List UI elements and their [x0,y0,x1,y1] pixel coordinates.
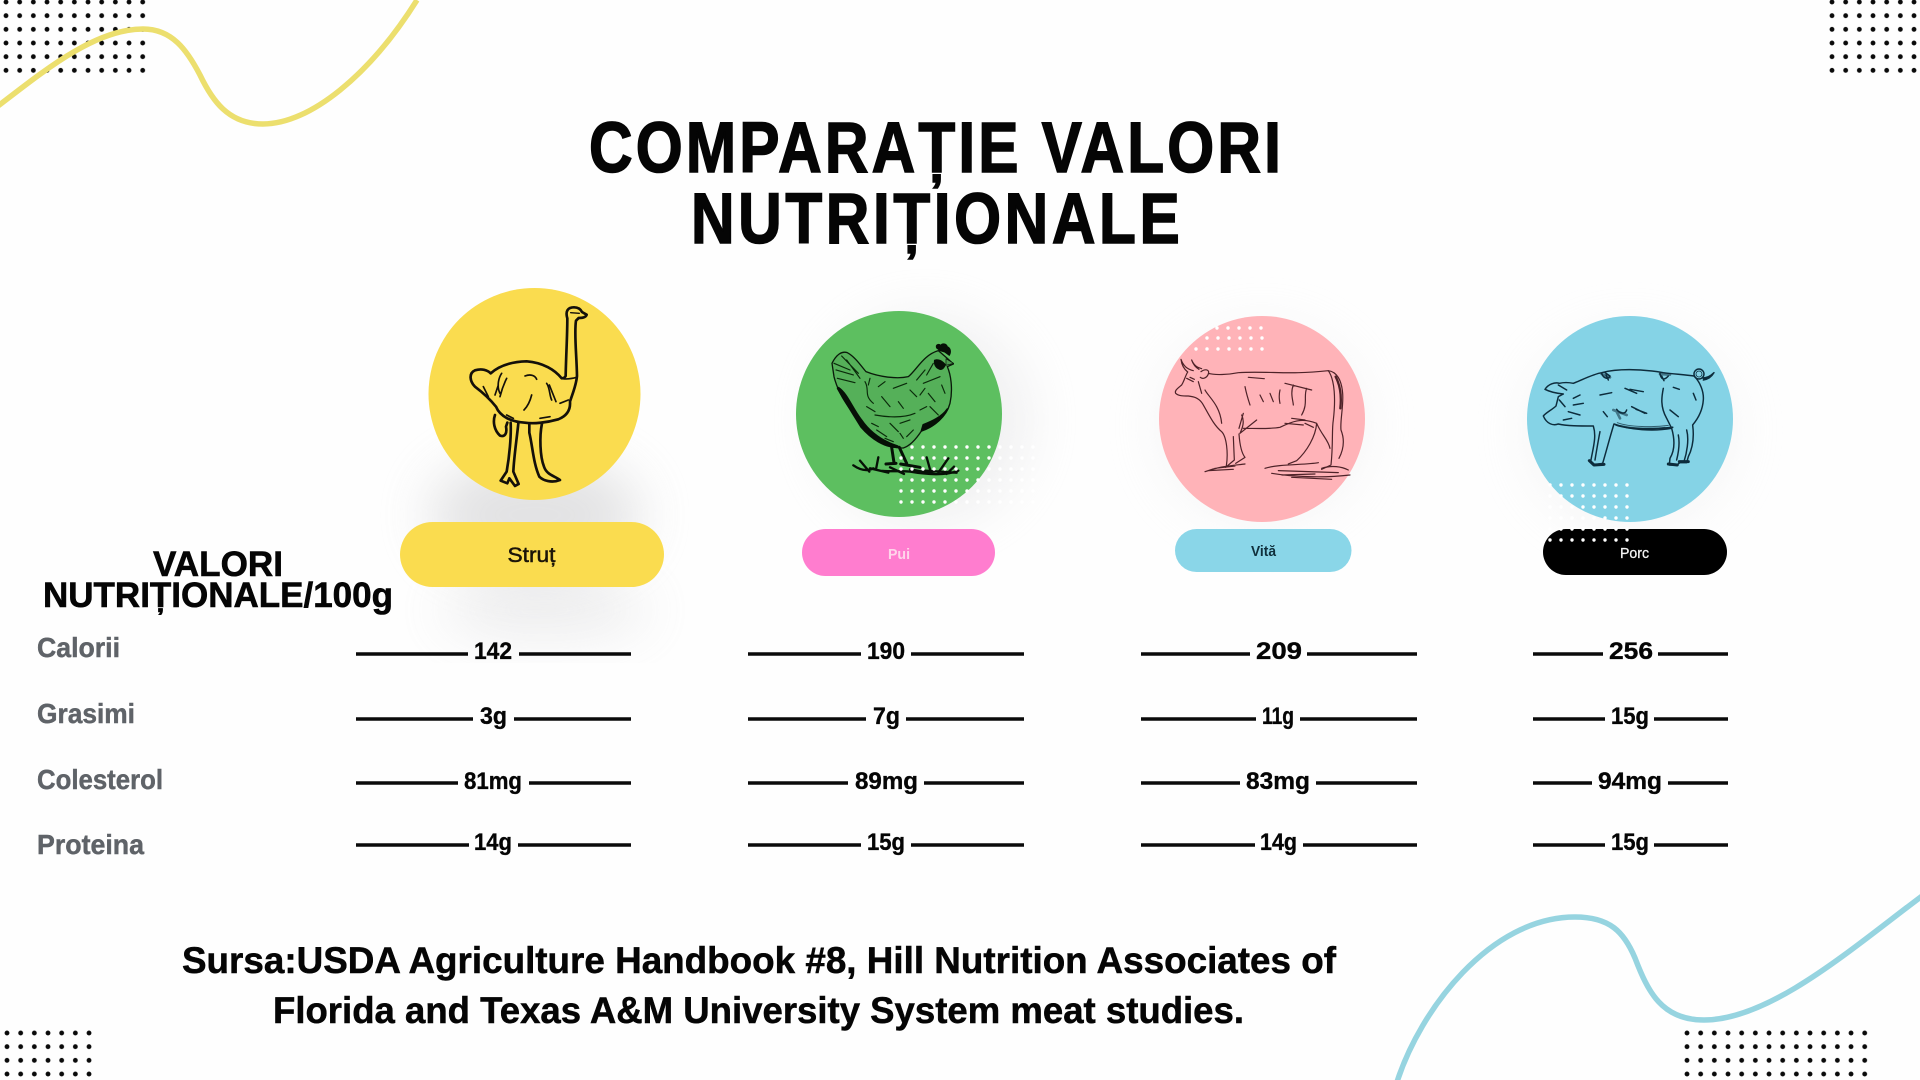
white dot texture [1190,322,1268,354]
source note [182,940,1337,1031]
values: Pui: 190 [867,638,905,665]
row labels: Grasimi [37,698,135,729]
heading: valori nutriționale per 100g: VALORI [153,545,283,584]
title: NUTRIȚIONALE [691,178,1180,259]
soft shadows behind the animal cards [430,315,1735,634]
values: Struț [356,638,631,856]
green circle [796,311,1002,517]
values: Porc: 15g [1611,703,1649,730]
values: Porc: 94mg [1598,768,1662,795]
card: Vită [1159,316,1365,572]
values: Vită: 11g [1262,703,1294,730]
pink circle [1159,316,1365,522]
values: Pui: 89mg [855,768,918,795]
card: Struț [400,288,664,587]
values: Struț: 3g [480,703,507,730]
values: Vită: 14g [1260,829,1297,856]
decoration: bottom-left dot grid [0,1026,96,1080]
decoration: top-right dot grid [1825,0,1920,77]
values: Pui [748,638,1024,856]
title: COMPARAȚIE VALORI [589,107,1281,188]
values: Vită [1141,638,1417,856]
row labels [37,632,163,860]
values: Porc [1533,638,1728,856]
label pill: Pui: Pui [888,546,910,563]
source note: Florida and Texas A&M University System meat studies. [273,990,1244,1031]
values: Struț: 81mg [464,768,522,795]
label pill: Porc [1543,529,1727,575]
white dot texture [896,442,1038,508]
values: Struț: 14g [474,829,512,856]
icon: pig [1543,369,1714,465]
heading: valori nutriționale per 100g: NUTRIȚIONALE/100g [43,576,393,615]
card: Pui [796,311,1038,576]
blue circle [1527,316,1733,522]
white dot texture over pill [1544,480,1632,546]
row labels: Calorii [37,632,120,663]
row labels: Colesterol [37,764,163,795]
heading: valori nutriționale per 100g [43,545,393,615]
label pill: Porc: Porc [1620,545,1649,562]
values: Pui: 7g [873,703,900,730]
icon: ostrich [471,307,587,486]
decoration: top-left dot grid [0,0,150,77]
values: Porc: 15g [1611,829,1649,856]
decoration: blue curve [1397,896,1920,1080]
card: Porc [1527,316,1733,575]
label pill: Pui [802,529,995,576]
values: Pui: 15g [867,829,905,856]
label pill: Vită: Vită [1251,544,1277,560]
values: Vită: 83mg [1246,768,1310,795]
source note: Sursa:USDA Agriculture Handbook #8, Hill Nutrition Associates of [182,940,1337,981]
values: Struț: 142 [474,638,512,665]
row labels: Proteina [37,829,144,860]
decoration: bottom-right dot grid [1680,1026,1872,1080]
label pill: Vită [1175,529,1352,572]
values: Porc: 256 [1609,638,1653,665]
icon: chicken [832,344,958,474]
yellow circle [428,288,640,500]
label pill: Struț: Struț [508,544,556,567]
values: Vită: 209 [1256,638,1302,665]
label pill: Struț [400,522,664,587]
icon: cow [1175,359,1350,479]
decoration: yellow curve [0,0,417,124]
title [589,107,1281,259]
